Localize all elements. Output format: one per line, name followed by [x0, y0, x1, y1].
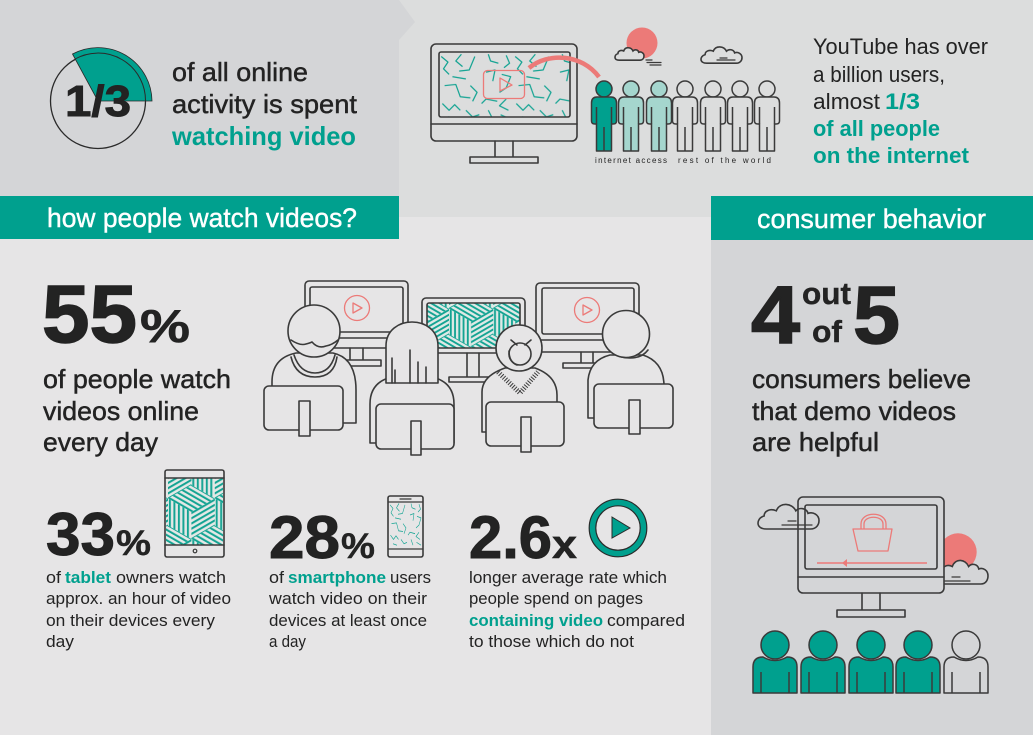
text: YouTube users	[813, 34, 988, 168]
stat: 2.6x longer: to those which do not	[469, 632, 634, 651]
stat: 33 percent tablet: tablet	[65, 568, 111, 587]
stat: 2.6x longer: people spend on pages	[469, 589, 643, 608]
heading: consumer behavior: consumer behavior	[757, 204, 986, 234]
legend: internet access: internet access	[595, 156, 667, 165]
heading: share of online activity: watching video	[171, 121, 356, 151]
stat: 33 percent tablet	[46, 501, 231, 651]
stat: 55 percent: every day	[43, 427, 158, 457]
stat: 2.6x longer: containing video	[469, 611, 603, 630]
stat: 4 out of 5: 5	[853, 270, 900, 361]
stat: 4 out of 5: consumers believe	[752, 364, 971, 394]
stat: 33 percent tablet: on their devices every	[46, 611, 215, 630]
icon: play button	[589, 499, 647, 557]
stat: 28 percent smartphone: watch video on their	[268, 589, 427, 608]
icon: shopping bag	[853, 514, 892, 551]
stat: 28 percent smartphone: users	[390, 568, 431, 587]
panel: one third of activity	[0, 0, 415, 197]
heading: share of online activity	[171, 57, 358, 151]
stat: 2.6x longer: longer average rate which	[469, 568, 667, 587]
heading: how people watch videos	[0, 196, 399, 239]
stat: 55 percent	[42, 269, 231, 457]
illustration: monitor with shopping video	[758, 497, 988, 617]
stat: 55 percent: videos online	[43, 396, 199, 426]
stat: 55 percent: %	[140, 300, 190, 352]
text: YouTube users: 1/3	[885, 89, 920, 114]
viewer centre right	[482, 325, 564, 452]
pie chart: one third	[50, 48, 152, 148]
text: YouTube users: on the internet	[813, 143, 970, 168]
video progress bar	[817, 559, 927, 567]
stat: 33 percent tablet: 33	[46, 501, 115, 568]
stat: 28 percent smartphone: %	[341, 527, 375, 566]
icon: tablet	[165, 470, 224, 557]
stat: 33 percent tablet: approx. an hour of video	[46, 589, 231, 608]
stat: 28 percent smartphone: 28	[269, 504, 340, 571]
stat: 4 out of 5: that demo videos	[752, 396, 956, 426]
stat: 2.6x longer: compared	[607, 611, 685, 630]
viewer left	[264, 305, 356, 436]
stat: 4 out of 5: are helpful	[752, 427, 879, 457]
text: YouTube users: a billion users,	[813, 62, 945, 87]
stat: 2.6x longer: x	[552, 523, 577, 567]
text: YouTube users: YouTube has over	[813, 34, 988, 59]
stat: 55 percent: of people watch	[43, 364, 231, 394]
stat: 2.6x longer	[469, 504, 685, 651]
stat: 28 percent smartphone: a day	[269, 632, 306, 651]
stat: 4 out of 5: of	[812, 314, 843, 349]
monitor centre	[422, 298, 525, 382]
illustration: sun and clouds	[615, 28, 742, 65]
monitor left	[305, 281, 408, 366]
stat: 4 out of 5: out	[802, 276, 851, 311]
stat: 28 percent smartphone	[268, 504, 431, 651]
heading: how people watch videos: how people watch videos?	[47, 203, 357, 233]
pictogram: people with internet access	[592, 81, 780, 151]
stat: 33 percent tablet: owners watch	[116, 568, 226, 587]
text: YouTube users: of all people	[813, 116, 940, 141]
viewer centre left	[370, 322, 454, 455]
pie chart: one third: 1/3	[65, 77, 131, 126]
legend: rest of the world: rest of the world	[678, 156, 771, 165]
panel: YouTube band	[399, 0, 1033, 217]
stat: 4 out of 5	[751, 270, 971, 457]
text: YouTube users: almost	[813, 89, 880, 114]
viewer right	[588, 310, 673, 434]
stat: 33 percent tablet: day	[46, 632, 74, 651]
pictogram: four of five consumers	[753, 631, 988, 693]
stat: 28 percent smartphone: smartphone	[288, 568, 386, 587]
heading: share of online activity: activity is spent	[172, 89, 358, 119]
stat: 4 out of 5: 4	[751, 270, 800, 361]
panel: consumer behaviour column	[711, 217, 1033, 735]
illustration: monitor with play button	[431, 44, 599, 163]
illustration: people watching monitors	[264, 281, 673, 455]
stat: 55 percent: 55	[42, 269, 137, 360]
icon: smartphone	[388, 496, 423, 557]
stat: 33 percent tablet: %	[116, 524, 151, 563]
stat: 2.6x longer: 2.6	[469, 504, 552, 571]
stat: 28 percent smartphone: devices at least once	[269, 611, 427, 630]
stat: 33 percent tablet: of	[46, 568, 61, 587]
stat: 28 percent smartphone: of	[269, 568, 284, 587]
monitor right	[536, 283, 639, 368]
heading: consumer behavior	[711, 196, 1033, 240]
heading: share of online activity: of all online	[172, 57, 308, 87]
